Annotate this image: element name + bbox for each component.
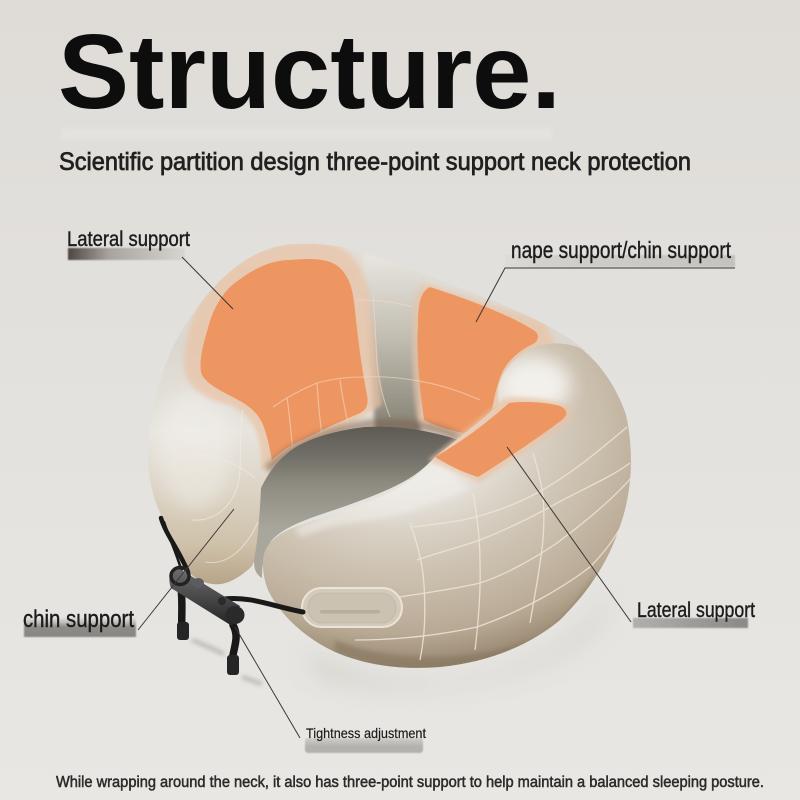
- label: lateral support bottom right: [507, 447, 755, 628]
- button inner: [308, 593, 396, 623]
- inner edge highlight: [296, 484, 464, 537]
- subtitle: Scientific partition design three-point support neck protection: [59, 148, 691, 176]
- title: Structure.: [58, 13, 561, 131]
- leader line: [138, 509, 234, 630]
- label: nape support/chin support: [476, 237, 735, 322]
- bottom dark band: [335, 575, 595, 668]
- drawcord: [161, 518, 303, 662]
- orange panel halo: lower: [428, 397, 572, 483]
- side control button: [302, 588, 402, 627]
- back body with left arm: [148, 244, 585, 584]
- roll highlight: [499, 357, 571, 413]
- front arm: [263, 343, 631, 668]
- pillow cast shadow: [300, 595, 610, 688]
- hole edge shade: [268, 424, 470, 470]
- label bar: [24, 618, 136, 637]
- button outer: [302, 588, 402, 627]
- title reflection: [62, 128, 552, 140]
- orange panel: nape support: [417, 287, 538, 433]
- orange panel halos: [184, 242, 556, 470]
- orange panel: lateral support lower: [435, 402, 566, 477]
- back seams: [273, 293, 480, 457]
- orange panel: lateral support upper: [200, 259, 368, 460]
- left arm highlight: [160, 398, 230, 512]
- leader line: [235, 627, 300, 738]
- grid seams on front: [355, 427, 631, 660]
- footer caption: While wrapping around the neck, it also has three-point support to help maintain a balanced sleeping posture.: [56, 774, 764, 791]
- pillow: [148, 240, 631, 688]
- buckle: [169, 568, 244, 626]
- nape shading: [370, 290, 423, 430]
- label: tightness adjustment: [235, 627, 426, 753]
- label text: chin support: [23, 606, 134, 633]
- button groove: [320, 610, 380, 614]
- label: lateral support top left: [67, 228, 233, 309]
- leader line: [476, 268, 735, 322]
- label bar: [305, 738, 423, 753]
- label bar: [505, 255, 735, 267]
- label text: Lateral support: [637, 599, 755, 622]
- hole: [254, 427, 462, 578]
- leader line: [182, 257, 233, 309]
- left arm seams: [190, 410, 258, 563]
- cord tip shadows: [192, 640, 262, 684]
- label bar: [68, 248, 185, 260]
- label text: Lateral support: [67, 228, 190, 251]
- front arm details: [295, 357, 595, 668]
- back surface details: [157, 240, 556, 563]
- label text: nape support/chin support: [511, 237, 731, 263]
- label: chin support: [23, 509, 234, 637]
- label bar: [633, 618, 748, 628]
- leader line: [507, 447, 631, 622]
- cord tips: [177, 622, 189, 640]
- label text: Tightness adjustment: [306, 725, 426, 741]
